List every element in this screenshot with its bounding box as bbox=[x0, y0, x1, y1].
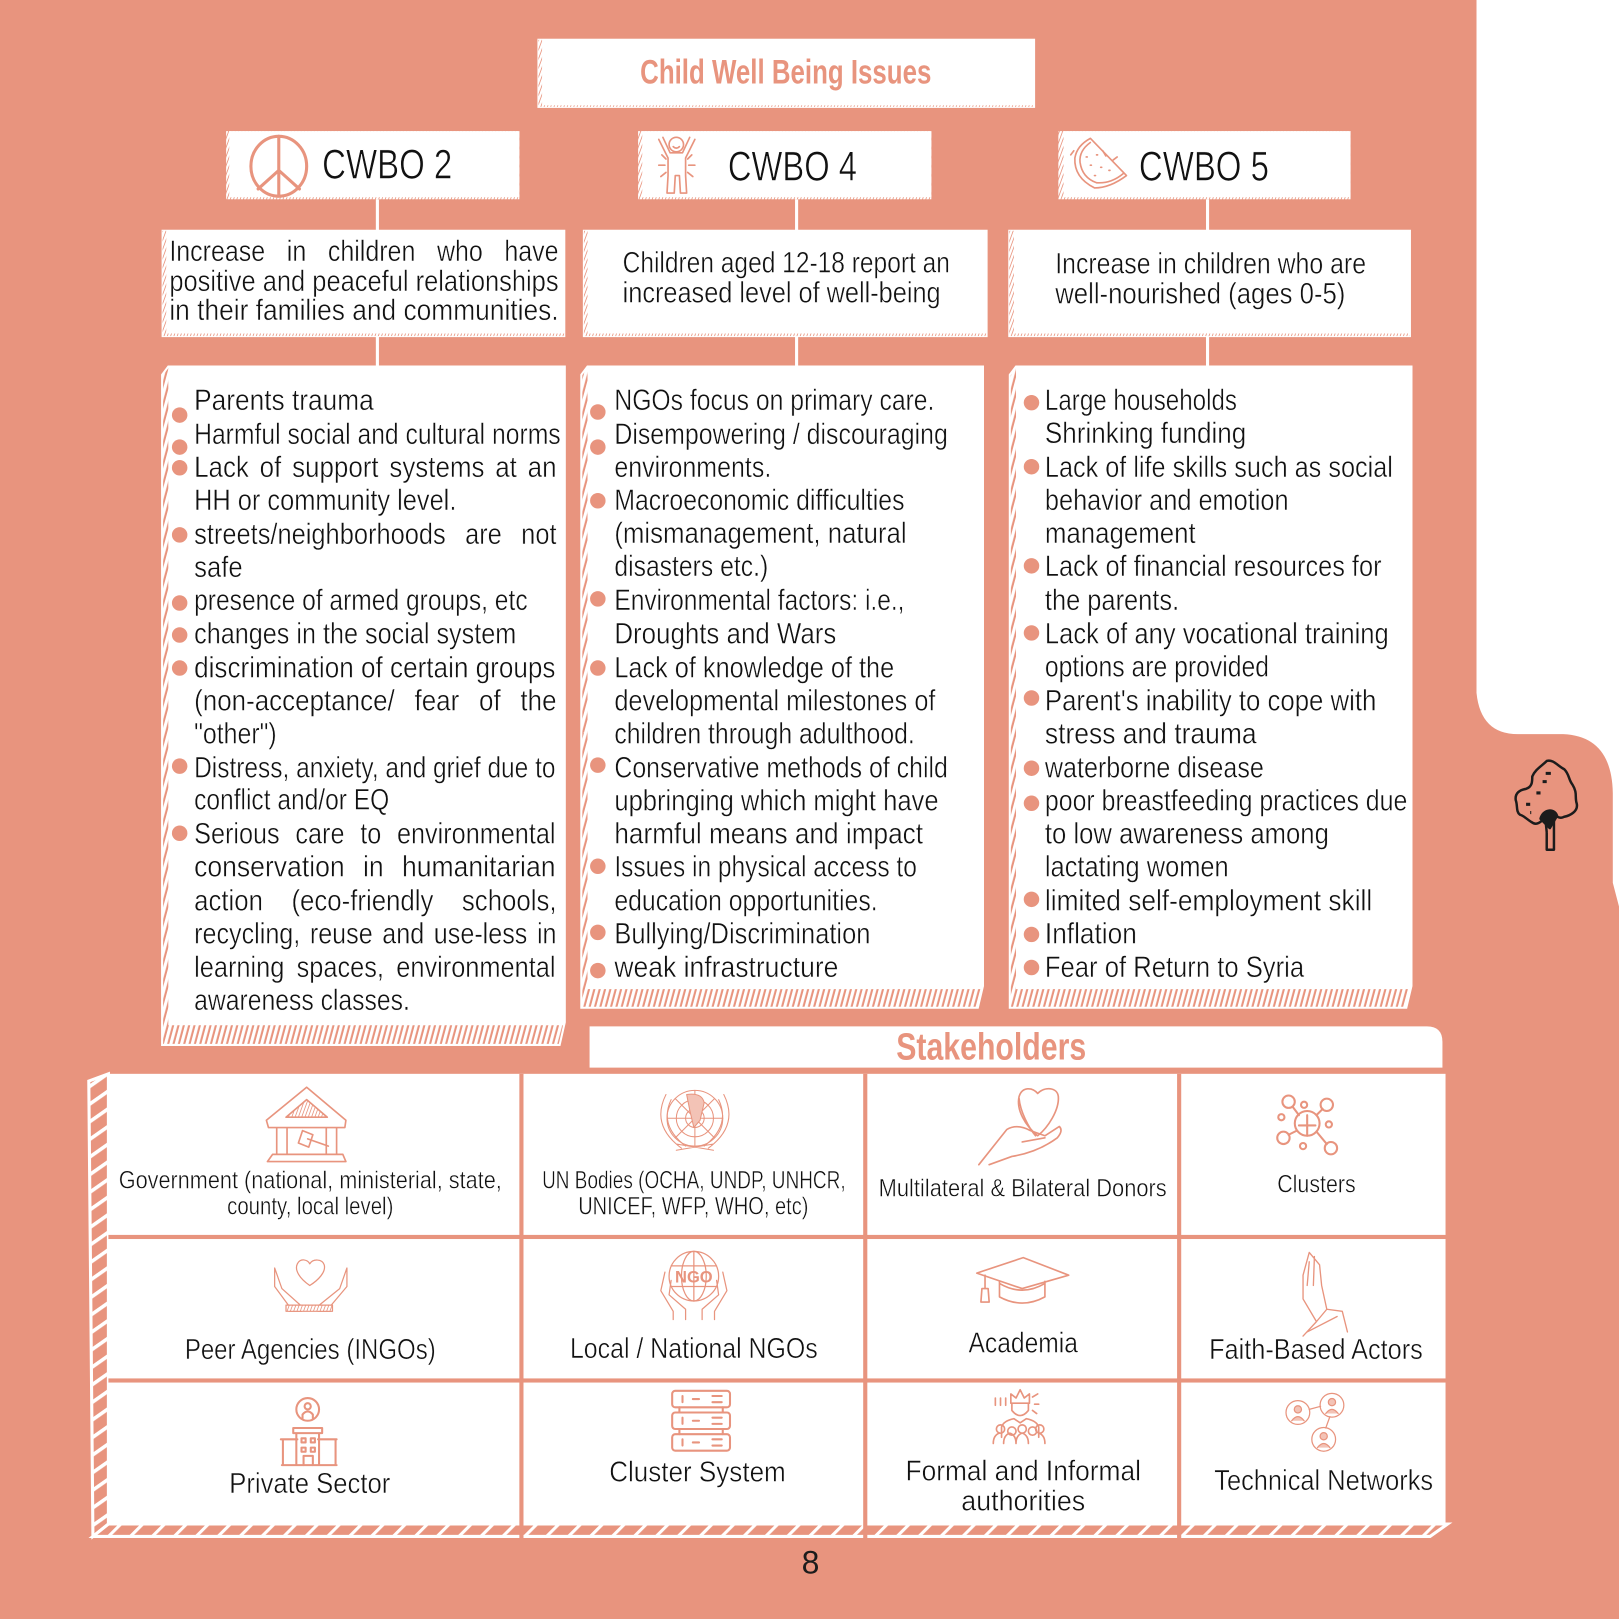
cell: Clusters bbox=[1277, 1096, 1356, 1199]
panel: CWBO 4 header bbox=[638, 131, 931, 199]
icon: hands with heart bbox=[275, 1260, 347, 1311]
icon: globe held by hands with NGO bbox=[661, 1251, 727, 1320]
title: Child Well Being Issues: Child Well Being Issues bbox=[640, 54, 931, 92]
panel: CWBO 2 issues list: recycling, reuse and use-less in bbox=[194, 918, 557, 951]
panel: CWBO 2 issues list: streets/neighborhoods are not bbox=[194, 518, 557, 551]
panel: CWBO 4 objective: Children aged 12-18 report an bbox=[623, 247, 950, 280]
page number: 8 bbox=[802, 1545, 819, 1581]
cell: UN Bodies bbox=[542, 1090, 846, 1220]
cell: Local / National NGOs: Local / National NGOs bbox=[570, 1333, 818, 1365]
icon: praying hands bbox=[1303, 1252, 1347, 1336]
panel: CWBO 4 issues list: harmful means and impact bbox=[614, 818, 924, 851]
cell: Private Sector: Private Sector bbox=[229, 1468, 391, 1500]
icon: graduation cap bbox=[977, 1258, 1069, 1303]
panel: CWBO 5 header: CWBO 5 bbox=[1139, 144, 1269, 190]
panel: CWBO 5 issues list: Parent's inability to cope with bbox=[1045, 684, 1376, 717]
panel: CWBO 5 issues list: poor breastfeeding practices due bbox=[1045, 785, 1407, 818]
cell: Clusters: Clusters bbox=[1277, 1171, 1356, 1199]
cell: Local / National NGOs bbox=[570, 1251, 818, 1365]
panel: CWBO 4 issues list: weak infrastructure bbox=[613, 951, 838, 984]
cell: Cluster System: Cluster System bbox=[609, 1457, 786, 1489]
panel: CWBO 5 issues list: management bbox=[1045, 517, 1196, 550]
icon: peace sign bbox=[251, 136, 307, 196]
panel: CWBO 4 issues list: Lack of knowledge of the bbox=[614, 651, 894, 684]
cell: Formal and Informal authorities: Formal and Informal bbox=[906, 1456, 1141, 1488]
panel: CWBO 5 issues list: Lack of life skills such as social bbox=[1045, 451, 1393, 484]
icon: linked people network bbox=[1286, 1393, 1344, 1451]
icon: server stack bbox=[672, 1391, 730, 1451]
panel: CWBO 4 issues list: Macroeconomic difficulties bbox=[614, 484, 904, 517]
cell: Government bbox=[119, 1087, 502, 1220]
title: Child Well Being Issues bbox=[538, 39, 1035, 107]
panel: CWBO 5 issues list: to low awareness among bbox=[1045, 818, 1329, 851]
panel: CWBO 2 issues list: conservation in humanitarian bbox=[194, 851, 555, 884]
panel: CWBO 5 issues list: limited self-employment skill bbox=[1045, 885, 1372, 918]
cell: Peer Agencies: Peer Agencies (INGOs) bbox=[185, 1334, 436, 1366]
panel: CWBO 2 objective: positive and peaceful relationships bbox=[169, 265, 559, 298]
panel: CWBO 5 issues list: stress and trauma bbox=[1045, 717, 1257, 750]
panel: CWBO 2 issues list: learning spaces, environmental bbox=[194, 951, 555, 984]
panel: CWBO 5 issues list: Shrinking funding bbox=[1045, 417, 1246, 450]
cell: Faith-Based Actors bbox=[1209, 1252, 1423, 1366]
panel: CWBO 2 issues list bbox=[162, 367, 565, 1045]
panel: CWBO 5 issues list: Inflation bbox=[1045, 918, 1137, 951]
panel: CWBO 5 header bbox=[1058, 131, 1351, 199]
cell: Academia bbox=[969, 1258, 1079, 1360]
icon: globe held by hands with NGO: NGO bbox=[675, 1267, 713, 1286]
cell: Academia: Academia bbox=[969, 1328, 1079, 1360]
panel: CWBO 2 issues list: action (eco-friendly schools, bbox=[194, 885, 557, 918]
panel: CWBO 4 issues list: Droughts and Wars bbox=[614, 617, 836, 650]
cell: Technical Networks bbox=[1214, 1393, 1433, 1497]
icon: person above office building bbox=[281, 1398, 337, 1465]
cell: UN Bodies: UNICEF, WFP, WHO, etc) bbox=[578, 1192, 808, 1220]
cell: Faith-Based Actors: Faith-Based Actors bbox=[1209, 1334, 1423, 1366]
panel: CWBO 5 issues list: behavior and emotion bbox=[1045, 484, 1289, 517]
panel: CWBO 5 objective: Increase in children who are bbox=[1055, 248, 1366, 281]
panel: CWBO 5 issues list: Lack of any vocational training bbox=[1045, 617, 1389, 650]
panel: CWBO 5 issues list: Large households bbox=[1045, 384, 1237, 417]
panel: CWBO 2 objective: Increase in children who have bbox=[169, 235, 559, 268]
panel: CWBO 5 objective bbox=[1009, 230, 1410, 337]
cell: Technical Networks: Technical Networks bbox=[1214, 1465, 1433, 1497]
panel: CWBO 2 issues list: Harmful social and cultural norms bbox=[194, 418, 561, 451]
panel: CWBO 5 issues list: Fear of Return to Syria bbox=[1045, 951, 1304, 984]
icon: tree on side tab bbox=[1516, 761, 1577, 850]
panel: CWBO 4 issues list: Issues in physical access to bbox=[614, 851, 917, 884]
panel: CWBO 2 issues list: conflict and/or EQ bbox=[194, 784, 389, 817]
icon: cluster network bbox=[1277, 1096, 1337, 1154]
cell: Cluster System bbox=[609, 1391, 786, 1489]
panel: CWBO 5 objective: well-nourished (ages 0-5) bbox=[1054, 278, 1345, 311]
panel: CWBO 2 issues list: changes in the social system bbox=[194, 617, 516, 650]
panel: CWBO 2 issues list: Serious care to environmental bbox=[194, 818, 555, 851]
panel: CWBO 2 header: CWBO 2 bbox=[322, 142, 452, 188]
panel: CWBO 2 objective: in their families and communities. bbox=[169, 294, 559, 327]
panel: CWBO 2 issues list: (non-acceptance/ fear of the bbox=[194, 684, 557, 717]
panel: CWBO 2 objective bbox=[162, 230, 565, 337]
panel: CWBO 4 issues list: Conservative methods of child bbox=[614, 751, 948, 784]
cell: Government: Government (national, ministerial, state, bbox=[119, 1166, 502, 1194]
icon: watermelon slice bbox=[1071, 138, 1126, 188]
panel: CWBO 4 issues list: developmental milestones of bbox=[614, 684, 936, 717]
icon: government building with gavel bbox=[266, 1087, 346, 1162]
panel: CWBO 4 issues list: NGOs focus on primary care. bbox=[614, 384, 934, 417]
cell: UN Bodies: UN Bodies (OCHA, UNDP, UNHCR, bbox=[542, 1166, 846, 1194]
panel: CWBO 5 issues list: lactating women bbox=[1045, 851, 1229, 884]
panel: CWBO 4 issues list: Bullying/Discrimination bbox=[614, 918, 870, 951]
panel: CWBO 2 issues list: Lack of support systems at an bbox=[194, 451, 557, 484]
cell: Multilateral & Bilateral Donors bbox=[879, 1089, 1167, 1203]
panel: CWBO 4 issues list: Environmental factors: i.e., bbox=[614, 584, 904, 617]
panel: CWBO 2 issues list: discrimination of certain groups bbox=[194, 651, 555, 684]
panel: CWBO 2 header bbox=[226, 131, 519, 199]
panel: CWBO 4 issues list: disasters etc.) bbox=[614, 550, 768, 583]
cell: Government: county, local level) bbox=[227, 1192, 393, 1220]
panel: CWBO 5 issues list: waterborne disease bbox=[1044, 751, 1264, 784]
table frame with hatched edges bbox=[89, 1074, 1448, 1538]
panel: stakeholders table bbox=[89, 1074, 1448, 1538]
icon: UN emblem bbox=[661, 1090, 729, 1150]
panel: CWBO 4 issues list: children through adulthood. bbox=[614, 717, 915, 750]
panel: CWBO 5 issues list: the parents. bbox=[1045, 584, 1179, 617]
cell: Peer Agencies bbox=[185, 1260, 436, 1366]
cell: Formal and Informal authorities: authorities bbox=[961, 1486, 1085, 1518]
panel: CWBO 2 issues list: safe bbox=[194, 551, 243, 584]
panel: CWBO 5 issues list bbox=[1010, 367, 1411, 1008]
panel: CWBO 2 issues list: Parents trauma bbox=[194, 384, 374, 417]
connectors between boxes bbox=[376, 199, 1209, 369]
panel: CWBO 4 issues list: (mismanagement, natural bbox=[614, 517, 907, 550]
heading: Stakeholders: Stakeholders bbox=[896, 1025, 1086, 1068]
icon: crowned leader and crowd bbox=[993, 1390, 1045, 1443]
panel: CWBO 4 issues list: environments. bbox=[614, 451, 771, 484]
panel: CWBO 4 header: CWBO 4 bbox=[728, 144, 857, 190]
heading: Stakeholders bbox=[590, 1025, 1442, 1068]
panel: CWBO 5 issues list: options are provided bbox=[1045, 650, 1269, 683]
panel: CWBO 5 issues list: Lack of financial resources for bbox=[1045, 550, 1382, 583]
panel: CWBO 2 issues list: Distress, anxiety, and grief due to bbox=[194, 751, 555, 784]
panel: CWBO 4 objective: increased level of well-being bbox=[623, 277, 941, 310]
icon: happy child figure bbox=[659, 137, 695, 193]
panel: CWBO 2 issues list: "other") bbox=[194, 717, 277, 750]
panel: CWBO 2 issues list: presence of armed groups, etc bbox=[194, 584, 528, 617]
cell: Multilateral & Bilateral Donors: Multilateral & Bilateral Donors bbox=[879, 1175, 1167, 1203]
panel: CWBO 2 issues list: awareness classes. bbox=[194, 984, 410, 1017]
panel: CWBO 4 objective bbox=[583, 230, 987, 337]
cell: Private Sector bbox=[229, 1398, 391, 1500]
panel: CWBO 4 issues list: Disempowering / discouraging bbox=[614, 418, 948, 451]
panel: CWBO 2 issues list: HH or community level. bbox=[194, 484, 456, 517]
icon: hand holding heart bbox=[979, 1089, 1061, 1165]
cell: Formal and Informal authorities bbox=[906, 1390, 1141, 1518]
panel: CWBO 4 issues list: upbringing which might have bbox=[614, 785, 939, 818]
panel: CWBO 4 issues list bbox=[581, 367, 983, 1008]
panel: CWBO 4 issues list: education opportunities. bbox=[614, 885, 878, 918]
